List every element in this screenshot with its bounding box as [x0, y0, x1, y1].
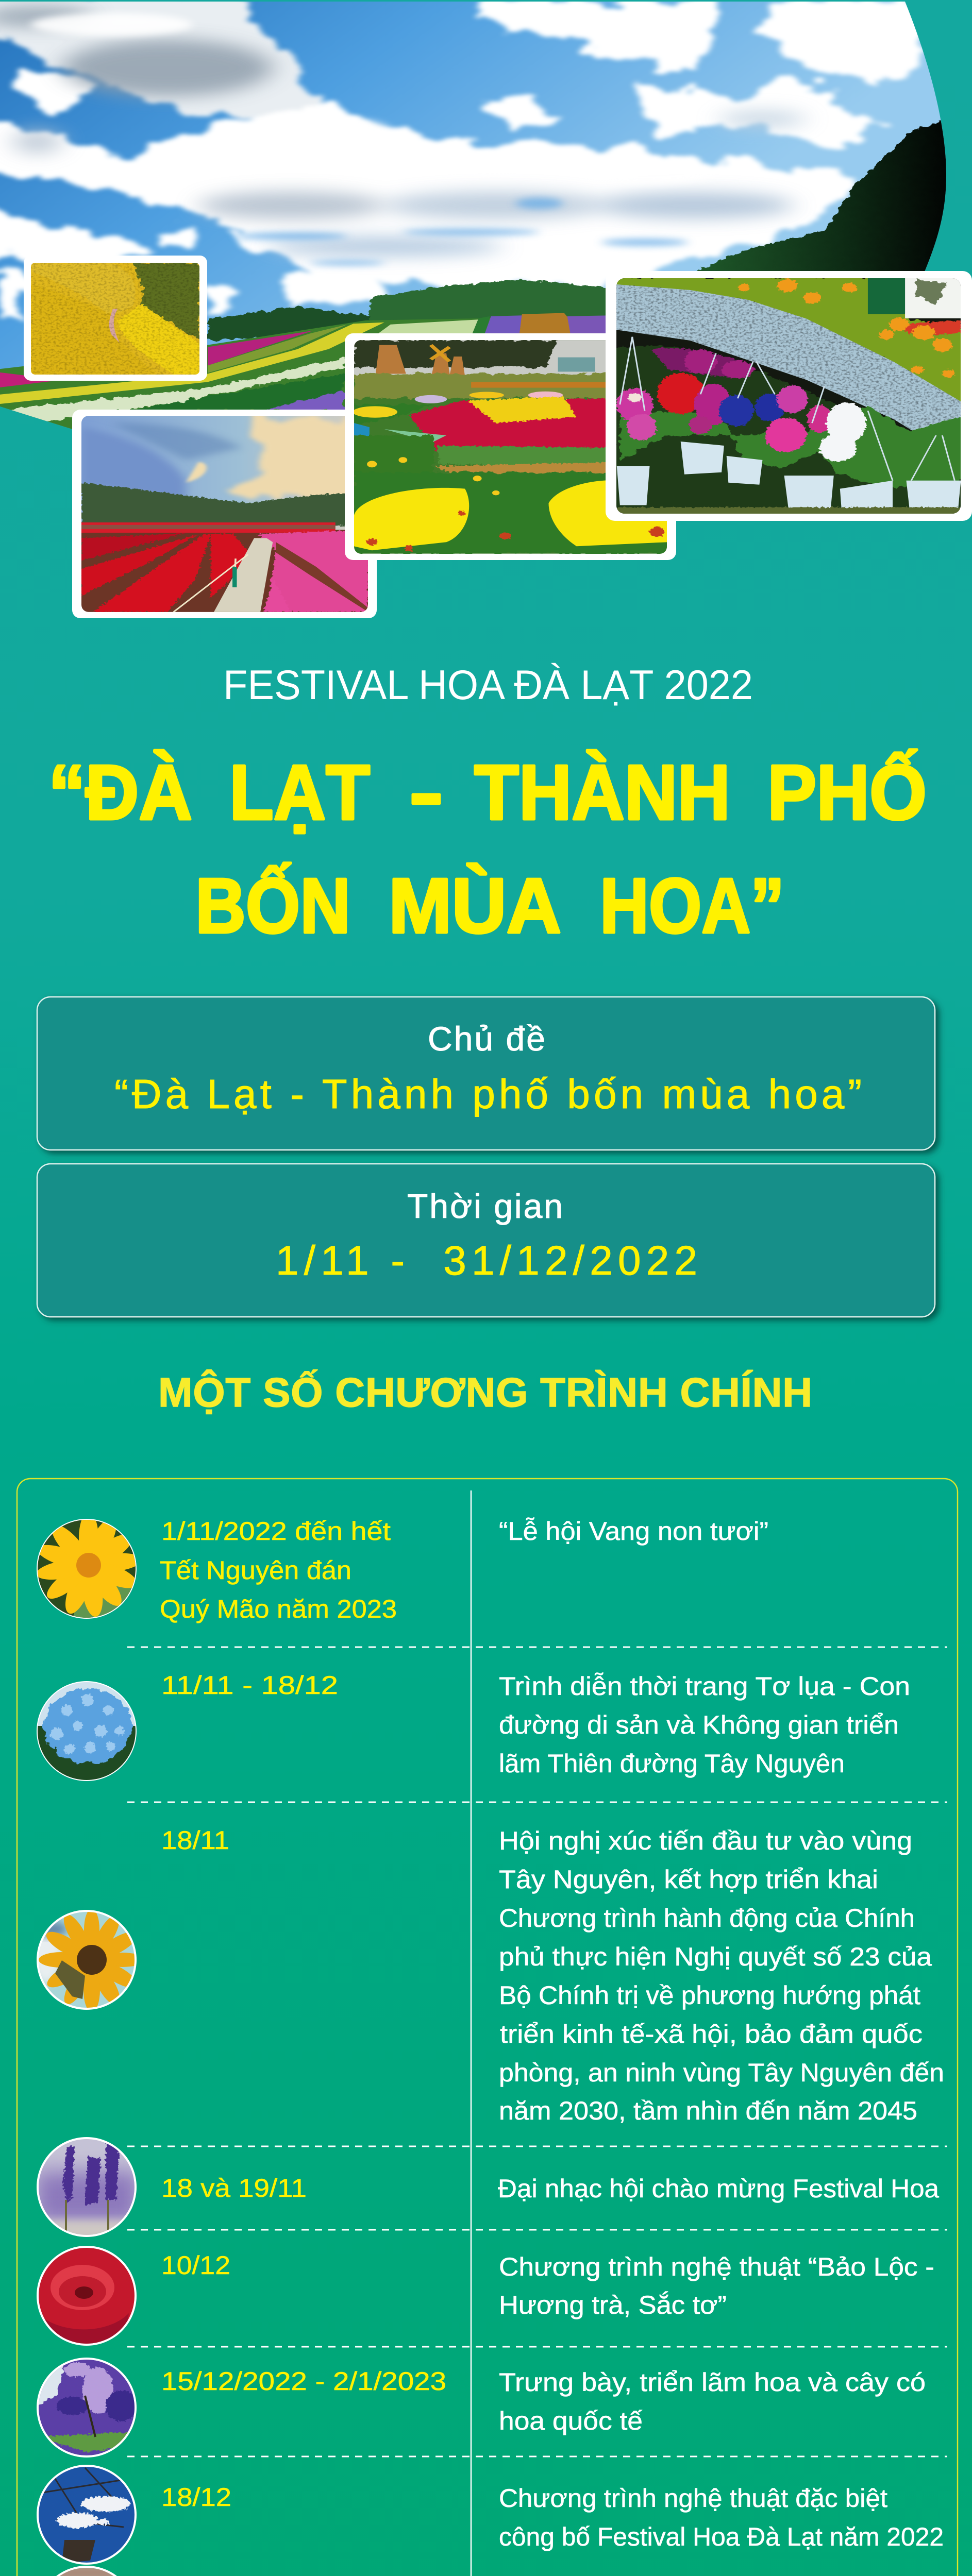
main title: “ĐÀ: [48, 749, 192, 836]
photo: hanging flower pots: [606, 271, 972, 521]
icon: red rose: [37, 2246, 137, 2347]
section heading: MỘT SỐ CHƯƠNG TRÌNH CHÍNH: [158, 1369, 812, 1415]
date: Quý Mão năm 2023: [160, 1595, 397, 1623]
description: [499, 2484, 944, 2551]
icon: sunflower: [37, 1910, 137, 2010]
hero: sky and flower field photo: [0, 0, 967, 452]
icon: lavender: [36, 2137, 139, 2241]
main title: BỐN: [195, 862, 350, 949]
date: 18 và 19/11: [161, 2174, 307, 2202]
description: [499, 2252, 934, 2319]
date: 11/11 - 18/12: [161, 1671, 338, 1700]
description: Chương trình nghệ thuật đặc biệt: [499, 2484, 887, 2513]
photo: red and pink flower rows: [72, 410, 377, 618]
main title: -: [409, 749, 443, 836]
description: “Lễ hội Vang non tươi”: [499, 1517, 768, 1546]
row 8: [36, 2565, 683, 2576]
icon: blue hydrangea: [36, 1680, 139, 1783]
date: Tết Nguyên đán: [160, 1556, 351, 1585]
panel: time: [37, 1164, 935, 1317]
icon: jacaranda: [36, 2357, 139, 2460]
photo: yellow flower hill: [24, 256, 207, 381]
row 2: [36, 1671, 910, 1783]
description: Trình diễn thời trang Tơ lụa - Con: [499, 1672, 910, 1701]
icon: yellow wild sunflower: [37, 1519, 137, 1619]
row 6: [36, 2357, 926, 2460]
description: Trưng bày, triển lãm hoa và cây có: [499, 2368, 926, 2397]
date: 10/12: [161, 2251, 230, 2280]
description: năm 2030, tầm nhìn đến năm 2045: [499, 2096, 917, 2125]
panel: time: Thời gian: [407, 1187, 563, 1225]
description: Chương trình nghệ thuật “Bảo Lộc -: [499, 2252, 934, 2281]
row 5: [37, 2246, 934, 2347]
main title: HOA”: [600, 862, 784, 949]
description: phủ thực hiện Nghị quyết số 23 của: [499, 1942, 932, 1971]
date: 18/11: [161, 1826, 229, 1855]
icon: small white flowers: [36, 2565, 139, 2576]
subtitle: FESTIVAL HOA ĐÀ LẠT 2022: [223, 662, 753, 708]
panel: theme: “Đà Lạt - Thành phố bốn mùa hoa”: [114, 1071, 862, 1117]
main title: LẠT: [229, 749, 370, 836]
photo: tulip garden with windmills: [345, 333, 676, 560]
description: công bố Festival Hoa Đà Lạt năm 2022: [499, 2522, 944, 2551]
panel: theme: Chủ đề: [428, 1020, 545, 1058]
main title: PHỐ: [767, 749, 927, 836]
description: Hội nghị xúc tiến đầu tư vào vùng: [499, 1826, 912, 1855]
description: phòng, an ninh vùng Tây Nguyên đến: [499, 2058, 944, 2087]
description: [499, 2368, 926, 2435]
date: 18/12: [161, 2483, 231, 2512]
main title: [48, 749, 927, 949]
icon: white bauhinia on blue sky: [36, 2464, 139, 2567]
date: [160, 1517, 397, 1623]
description: đường di sản và Không gian triển: [499, 1710, 899, 1739]
panel: theme: [37, 997, 935, 1150]
description: Đại nhạc hội chào mừng Festival Hoa: [498, 2174, 939, 2203]
description: Tây Nguyên, kết hợp triển khai: [499, 1865, 878, 1894]
description: [499, 1826, 944, 2125]
panel: time: 1/11 - 31/12/2022: [276, 1238, 697, 1283]
row 7: [36, 2464, 944, 2567]
description: Hương trà, Sắc tơ”: [499, 2291, 727, 2319]
date: 1/11/2022 đến hết: [161, 1517, 391, 1546]
date: 15/12/2022 - 2/1/2023: [161, 2367, 446, 2396]
description: [499, 1672, 910, 1778]
main title: MÙA: [389, 862, 561, 949]
row 3: [31, 1826, 944, 2125]
row 1: [35, 1512, 768, 1623]
description: Bộ Chính trị về phương hướng phát: [499, 1981, 920, 2010]
main title: THÀNH: [474, 749, 730, 836]
row 4: [36, 2137, 939, 2241]
description: lãm Thiên đường Tây Nguyên: [499, 1749, 845, 1778]
description: Chương trình hành động của Chính: [499, 1904, 915, 1933]
description: triển kinh tế-xã hội, bảo đảm quốc: [500, 2020, 923, 2048]
description: hoa quốc tế: [499, 2406, 643, 2435]
panel: programme table: [17, 1479, 958, 2576]
